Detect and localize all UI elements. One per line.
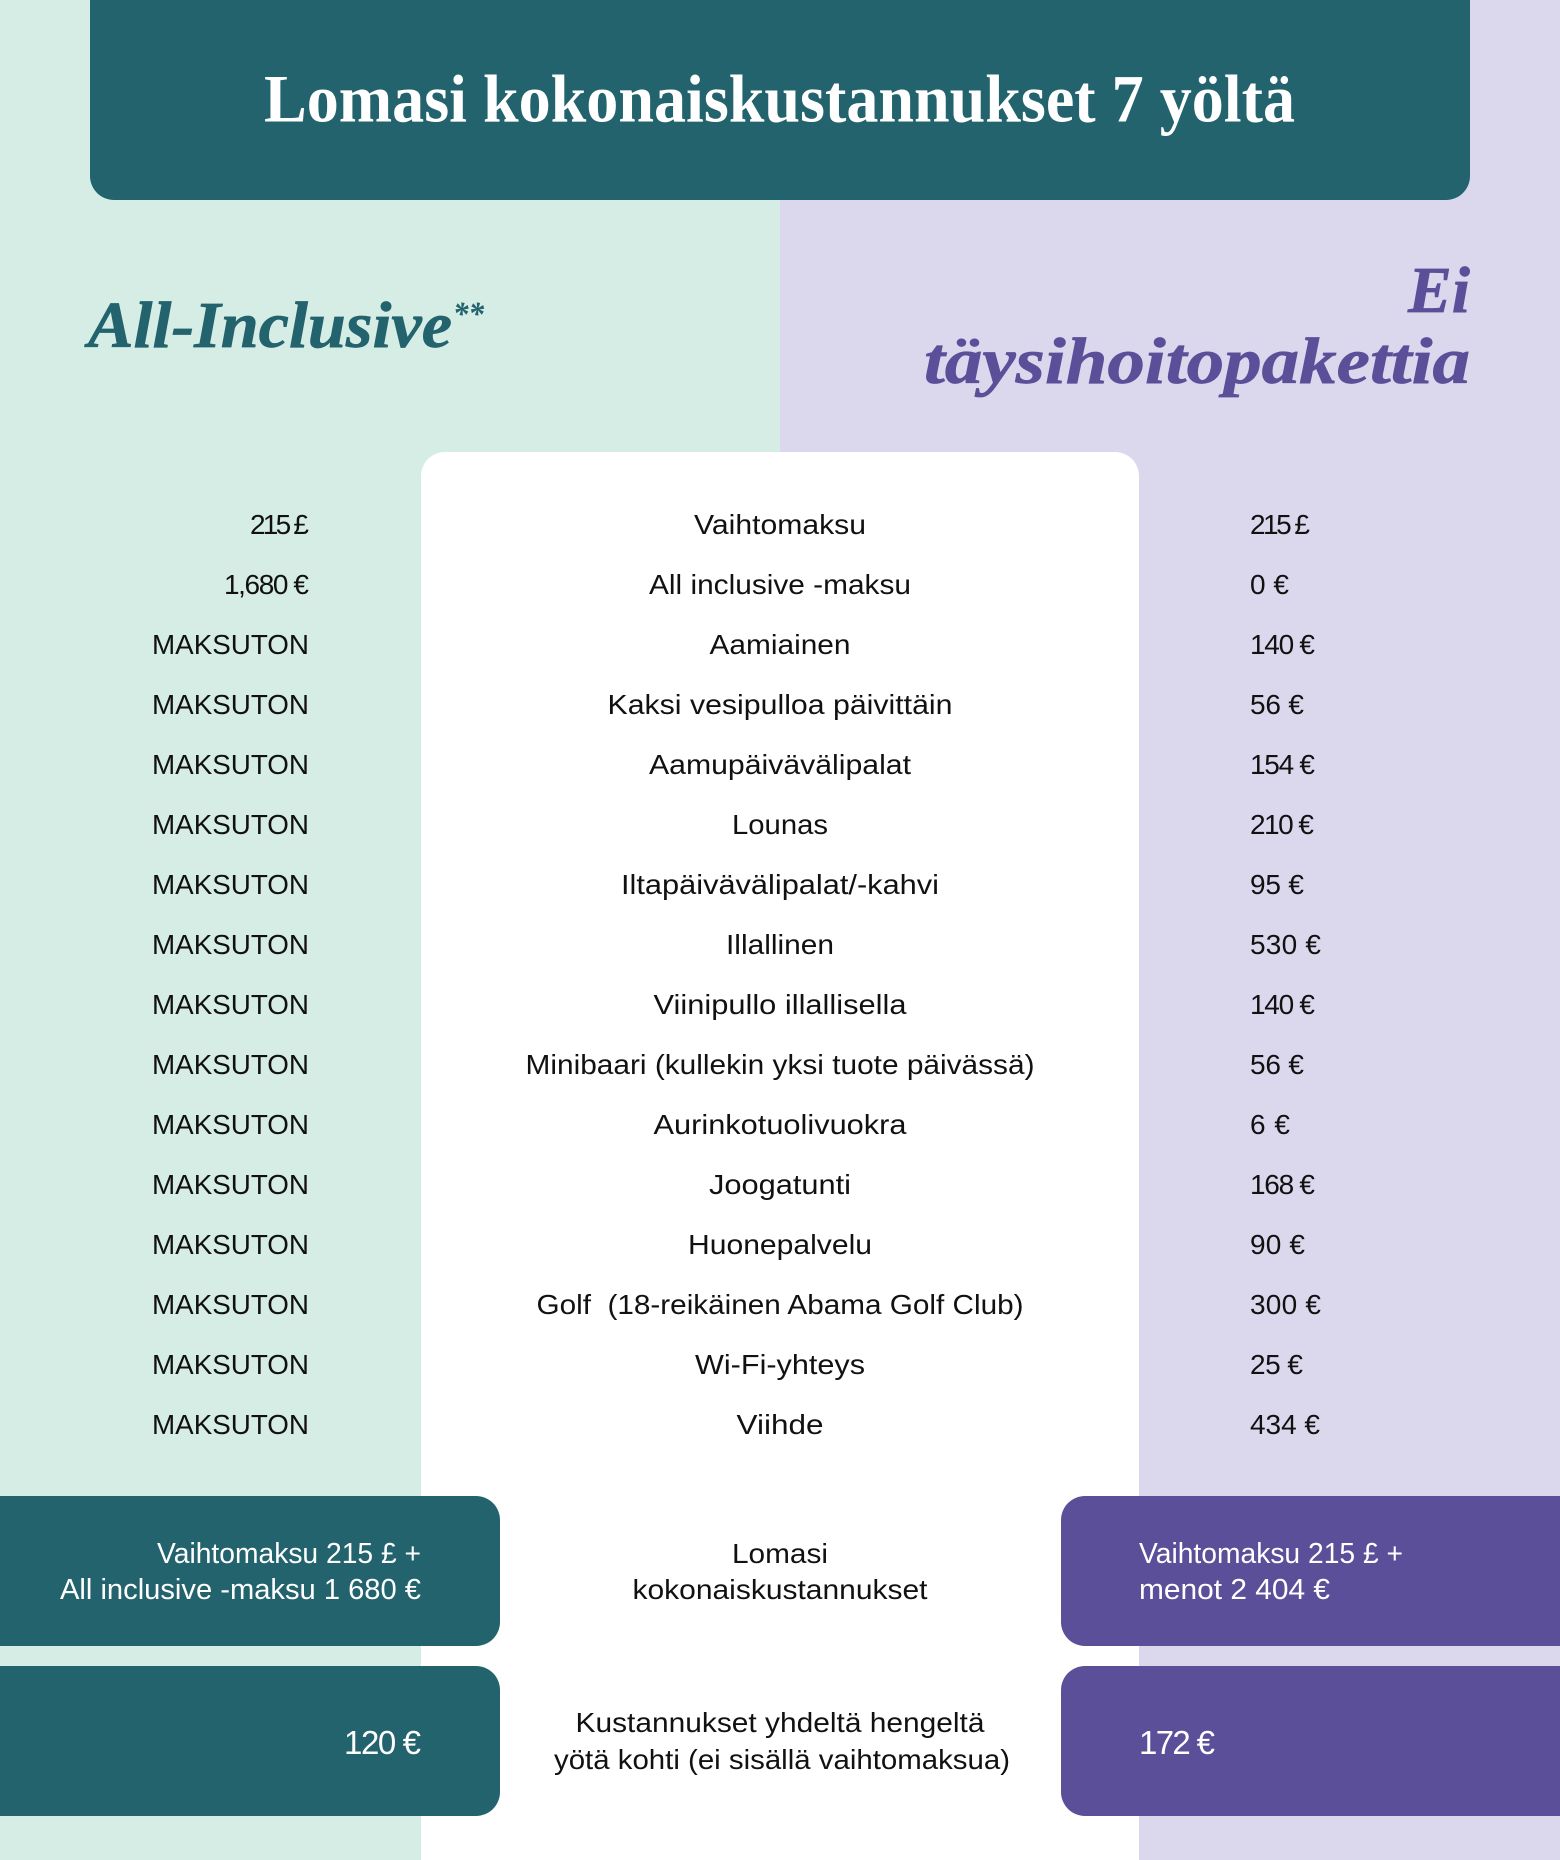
row: Viihde: Viihde [736, 1409, 824, 1440]
row: All inclusive -maksu [224, 569, 1289, 600]
row: Wi-Fi-yhteys: MAKSUTON [152, 1349, 309, 1380]
row: Huonepalvelu: 90 € [1250, 1229, 1305, 1260]
total cost label [632, 1538, 928, 1605]
row: Aamiainen: 140 € [1250, 629, 1315, 660]
row: Aamupäivävälipalat: 154 € [1250, 749, 1315, 780]
heading: All-Inclusive: All-Inclusive [84, 289, 452, 362]
row: Huonepalvelu: Huonepalvelu [688, 1229, 872, 1260]
row: Viinipullo illallisella [152, 989, 1315, 1020]
title banner [90, 0, 1470, 200]
row: Minibaari: Minibaari (kullekin yksi tuote päivässä) [526, 1049, 1034, 1080]
row: Minibaari [152, 1049, 1304, 1080]
title banner: Lomasi kokonaiskustannukset 7 yöltä [264, 60, 1295, 136]
row: Lounas: 210 € [1250, 809, 1314, 840]
row: Aurinkotuolivuokra: MAKSUTON [152, 1109, 309, 1140]
row: Illallinen [152, 929, 1321, 960]
row: Golf: 300 € [1250, 1289, 1321, 1320]
total cost box: all-inclusive: All inclusive -maksu 1 680 € [60, 1574, 421, 1606]
row: Minibaari: 56 € [1250, 1049, 1304, 1080]
row: Viinipullo illallisella: 140 € [1250, 989, 1315, 1020]
row: Lounas: Lounas [732, 809, 828, 840]
row: Wi-Fi-yhteys: Wi-Fi-yhteys [695, 1349, 865, 1380]
row: Aamupäivävälipalat [152, 749, 1315, 780]
row: Viinipullo illallisella: MAKSUTON [152, 989, 309, 1020]
heading: Ei täysihoitopakettia: Ei [1407, 254, 1471, 327]
row: Vaihtomaksu [250, 509, 1310, 540]
row: Aurinkotuolivuokra: 6 € [1250, 1109, 1290, 1140]
per-person box: all-inclusive [0, 1666, 500, 1816]
row: Viihde [152, 1409, 1320, 1440]
row: Vaihtomaksu: 215 £ [250, 509, 309, 540]
row: Aurinkotuolivuokra: Aurinkotuolivuokra [654, 1109, 907, 1140]
total cost label: kokonaiskustannukset [632, 1574, 928, 1605]
row: Viihde: MAKSUTON [152, 1409, 309, 1440]
row: Golf: MAKSUTON [152, 1289, 309, 1320]
row: Joogatunti [152, 1169, 1315, 1200]
row: Wi-Fi-yhteys: 25 € [1250, 1349, 1303, 1380]
row: Illallinen: 530 € [1250, 929, 1321, 960]
row: Iltapäivävälipalat/-kahvi [152, 869, 1304, 900]
row: Iltapäivävälipalat/-kahvi: Iltapäivävälipalat/-kahvi [621, 869, 939, 900]
row: Vaihtomaksu: 215 £ [1250, 509, 1310, 540]
row: Illallinen: MAKSUTON [152, 929, 309, 960]
row: Golf [152, 1289, 1321, 1320]
panel: all-inclusive column background [0, 0, 780, 1860]
row: Kaksi vesipulloa päivittäin: MAKSUTON [152, 689, 309, 720]
row: Huonepalvelu: MAKSUTON [152, 1229, 309, 1260]
row: Kaksi vesipulloa päivittäin: Kaksi vesipulloa päivittäin [608, 689, 952, 720]
total cost label: Lomasi [732, 1538, 828, 1569]
row: Viihde: 434 € [1250, 1409, 1320, 1440]
per-person label: Kustannukset yhdeltä hengeltä [576, 1707, 985, 1738]
per-person box: all-inclusive: 120 € [344, 1724, 421, 1761]
heading: All-Inclusive: ** [453, 296, 485, 333]
row: Golf: Golf (18-reikäinen Abama Golf Club) [536, 1289, 1024, 1320]
row: Joogatunti: 168 € [1250, 1169, 1315, 1200]
row: All inclusive -maksu: All inclusive -maksu [649, 569, 911, 600]
total cost box: no package: menot 2 404 € [1139, 1574, 1330, 1606]
row: Aamiainen: Aamiainen [710, 629, 850, 660]
row: Vaihtomaksu: Vaihtomaksu [694, 509, 866, 540]
row: Iltapäivävälipalat/-kahvi: MAKSUTON [152, 869, 309, 900]
total cost box: all-inclusive [0, 1496, 500, 1646]
row: Huonepalvelu [152, 1229, 1305, 1260]
row: Viinipullo illallisella: Viinipullo illallisella [654, 989, 907, 1020]
row: Aamupäivävälipalat: MAKSUTON [152, 749, 309, 780]
row: All inclusive -maksu: 1,680 € [224, 569, 309, 600]
row: All inclusive -maksu: 0 € [1250, 569, 1289, 600]
row: Illallinen: Illallinen [726, 929, 834, 960]
row: Aurinkotuolivuokra [152, 1109, 1290, 1140]
row: Aamiainen [152, 629, 1315, 660]
row: Joogatunti: Joogatunti [709, 1169, 851, 1200]
row: Joogatunti: MAKSUTON [152, 1169, 309, 1200]
row: Iltapäivävälipalat/-kahvi: 95 € [1250, 869, 1304, 900]
total cost box: no package [1061, 1496, 1560, 1646]
total cost box: all-inclusive: Vaihtomaksu 215 £ + [157, 1538, 421, 1570]
per-person label [554, 1707, 1010, 1775]
panel: no-package column background [780, 0, 1560, 1860]
per-person box: no package [1061, 1666, 1560, 1816]
row: Aamupäivävälipalat: Aamupäivävälipalat [649, 749, 911, 780]
heading: Ei täysihoitopakettia: täysihoitopakettia [924, 325, 1470, 398]
row: Kaksi vesipulloa päivittäin: 56 € [1250, 689, 1304, 720]
heading: Ei täysihoitopakettia [924, 254, 1471, 398]
row: Lounas: MAKSUTON [152, 809, 309, 840]
per-person label: yötä kohti (ei sisällä vaihtomaksua) [554, 1744, 1010, 1775]
per-person box: no package: 172 € [1139, 1724, 1215, 1761]
row: Lounas [152, 809, 1314, 840]
row: Aamiainen: MAKSUTON [152, 629, 309, 660]
total cost box: no package: Vaihtomaksu 215 £ + [1139, 1538, 1403, 1570]
row: Minibaari: MAKSUTON [152, 1049, 309, 1080]
panel: centre white column [421, 452, 1139, 1860]
row: Kaksi vesipulloa päivittäin [152, 689, 1304, 720]
row: Wi-Fi-yhteys [152, 1349, 1303, 1380]
